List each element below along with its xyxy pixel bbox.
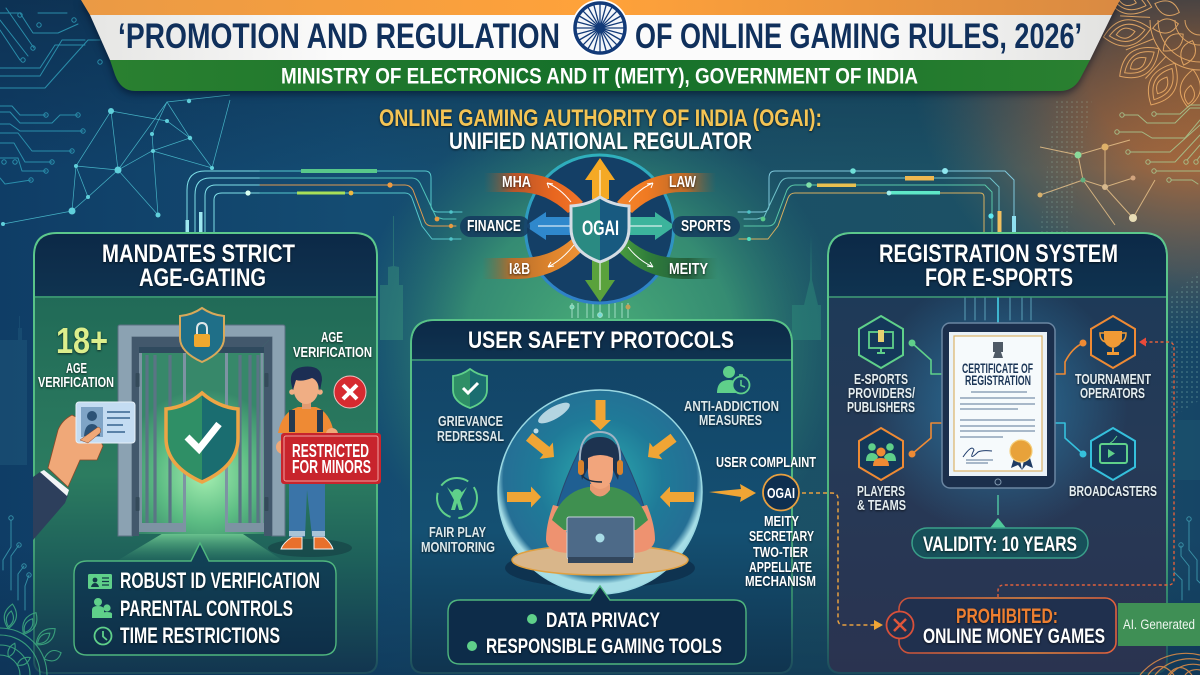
players and teams: PLAYERS bbox=[857, 483, 905, 500]
meity secretary label: SECRETARY bbox=[749, 528, 814, 545]
saffron band bbox=[81, 0, 1120, 15]
title text: ‘PROMOTION AND REGULATION bbox=[118, 17, 560, 56]
restricted sign: FOR MINORS bbox=[292, 457, 371, 477]
label pill sports bbox=[672, 216, 740, 237]
certificate title: CERTIFICATE OF bbox=[962, 361, 1033, 376]
circuit traces: top right bbox=[1115, 105, 1200, 184]
meity secretary label: MEITY bbox=[764, 513, 799, 530]
panel header: USER SAFETY PROTOCOLS bbox=[468, 327, 734, 354]
grievance redressal: GRIEVANCE bbox=[438, 413, 503, 430]
anti-addiction measures: ANTI-ADDICTION bbox=[684, 398, 779, 415]
hub disc bbox=[526, 155, 674, 303]
hair bbox=[580, 437, 620, 480]
security gate bbox=[115, 325, 285, 562]
time restrictions text: TIME RESTRICTIONS bbox=[120, 623, 280, 648]
arrow right bbox=[626, 212, 675, 240]
table bbox=[512, 545, 688, 575]
hand with id card bbox=[33, 402, 135, 540]
ai generated tag bbox=[1118, 603, 1200, 646]
certificate body lines bbox=[960, 392, 1035, 463]
arrow left bbox=[525, 212, 574, 240]
appellate label: MECHANISM bbox=[745, 573, 816, 590]
white band bbox=[90, 15, 1112, 60]
arms bbox=[546, 505, 572, 553]
tournament operators: TOURNAMENT bbox=[1075, 371, 1151, 388]
title banner bbox=[81, 0, 1120, 91]
panel header: FOR E-SPORTS bbox=[925, 264, 1073, 292]
fair play monitoring bbox=[421, 478, 495, 556]
band MEITY bbox=[619, 237, 718, 279]
network nodes: left bbox=[1, 95, 230, 226]
18+ badge: AGE bbox=[66, 360, 87, 377]
prohibited box bbox=[899, 598, 1116, 653]
panel body bbox=[34, 233, 377, 673]
age verification label bbox=[293, 329, 372, 361]
panel header bbox=[35, 234, 376, 297]
gold seal bbox=[1010, 440, 1033, 470]
hub to panel traces bbox=[570, 303, 630, 318]
band I&B bbox=[482, 237, 581, 279]
18+ badge: 18+ bbox=[56, 320, 108, 361]
platform bbox=[505, 548, 695, 588]
band MHA bbox=[484, 173, 583, 213]
circuit traces: hub left bbox=[186, 169, 462, 241]
anti-addiction measures bbox=[684, 366, 779, 429]
certificate tablet bbox=[942, 323, 1055, 488]
mandala: top right bbox=[1101, 0, 1200, 111]
panel: user safety bbox=[411, 320, 816, 673]
connector traces bbox=[912, 298, 1083, 454]
robust id text: ROBUST ID VERIFICATION bbox=[120, 568, 320, 593]
signature bbox=[963, 448, 992, 457]
grievance redressal bbox=[437, 369, 504, 445]
dashed arrow: complaint to prohibited bbox=[802, 493, 883, 630]
icon: clock bbox=[94, 628, 112, 644]
appellate label: APPELLATE bbox=[749, 559, 812, 576]
appellate label bbox=[745, 544, 816, 590]
panel header bbox=[829, 234, 1166, 297]
players and teams bbox=[857, 428, 916, 514]
broadcasters: BROADCASTERS bbox=[1069, 483, 1157, 500]
gamer in protective bubble bbox=[498, 390, 702, 594]
panel header: REGISTRATION SYSTEM bbox=[879, 240, 1118, 268]
complaint pathway bbox=[709, 454, 816, 590]
hub shield: OGAI bbox=[582, 217, 619, 240]
icon: prohibited bbox=[886, 612, 914, 638]
e-sports providers: E-SPORTS bbox=[854, 371, 908, 388]
e-sports providers bbox=[847, 316, 916, 416]
restricted sign: RESTRICTED bbox=[292, 441, 369, 461]
restricted minor figure bbox=[268, 367, 352, 557]
band LAW bbox=[617, 173, 716, 213]
circuit traces: left margin bbox=[3, 516, 31, 610]
tournament operators: OPERATORS bbox=[1080, 385, 1145, 402]
check shield bbox=[166, 393, 238, 482]
broadcasters bbox=[1069, 428, 1157, 500]
grievance redressal: REDRESSAL bbox=[437, 428, 504, 445]
shirt bbox=[552, 487, 648, 530]
id and controls list bbox=[74, 543, 336, 655]
icon: id card bbox=[88, 574, 112, 589]
responsible gaming text: RESPONSIBLE GAMING TOOLS bbox=[486, 635, 722, 658]
players and teams: & TEAMS bbox=[857, 497, 906, 514]
laptop bbox=[567, 517, 634, 563]
band MHA: MHA bbox=[502, 174, 531, 191]
network nodes: right bbox=[1038, 140, 1155, 225]
heading line two: UNIFIED NATIONAL REGULATOR bbox=[449, 128, 752, 155]
mandala: bottom right bbox=[1140, 653, 1200, 675]
certificate title second line: REGISTRATION bbox=[965, 373, 1031, 388]
prohibited box: PROHIBITED: bbox=[956, 605, 1058, 628]
band I&B: I&B bbox=[509, 261, 530, 278]
age verification label: VERIFICATION bbox=[293, 344, 372, 361]
ogai circle: OGAI bbox=[767, 485, 795, 502]
circuit traces: hub right bbox=[738, 168, 1016, 241]
e-sports providers: PROVIDERS/ bbox=[848, 385, 916, 402]
icon: parents bbox=[92, 598, 112, 618]
chair bbox=[556, 445, 645, 525]
icon: denied bbox=[334, 376, 366, 408]
appellate label: TWO-TIER bbox=[753, 544, 808, 561]
18+ badge: VERIFICATION bbox=[38, 374, 114, 391]
mandala: bottom left bbox=[0, 603, 63, 675]
complaint arrow bbox=[709, 484, 756, 502]
circuit traces: top left bbox=[0, 8, 102, 184]
emblem bbox=[993, 342, 1003, 358]
label pill finance bbox=[460, 216, 530, 237]
validity pill: VALIDITY: 10 YEARS bbox=[923, 533, 1077, 556]
panel body bbox=[828, 233, 1167, 673]
subtitle: MINISTRY OF ELECTRONICS AND IT (MEITY), GOVERNMENT OF INDIA bbox=[281, 64, 918, 88]
e-sports providers: PUBLISHERS bbox=[847, 399, 915, 416]
age verification label: AGE bbox=[321, 329, 343, 346]
label pill finance: FINANCE bbox=[467, 218, 521, 235]
tournament operators bbox=[1075, 316, 1151, 402]
band LAW: LAW bbox=[669, 174, 696, 191]
title text continued: OF ONLINE GAMING RULES, 2026’ bbox=[635, 17, 1082, 56]
fair play monitoring: MONITORING bbox=[421, 539, 495, 556]
parental controls text: PARENTAL CONTROLS bbox=[120, 596, 293, 621]
face bbox=[588, 455, 613, 489]
privacy and tools box bbox=[448, 586, 746, 664]
protection arrows bbox=[507, 400, 694, 508]
hub shield bbox=[571, 197, 629, 262]
18+ badge bbox=[38, 320, 114, 391]
band MEITY: MEITY bbox=[669, 261, 709, 278]
headset bbox=[578, 432, 623, 482]
panel: e-sports registration bbox=[828, 233, 1167, 673]
prohibited box: ONLINE MONEY GAMES bbox=[923, 625, 1105, 648]
panel header bbox=[412, 321, 791, 360]
green band bbox=[110, 60, 1090, 91]
user complaint label: USER COMPLAINT bbox=[716, 454, 816, 471]
panel: age-gating bbox=[33, 233, 381, 673]
panel body bbox=[411, 320, 792, 673]
dashed arrow: prohibited to tournament bbox=[998, 338, 1174, 597]
data privacy text: DATA PRIVACY bbox=[546, 609, 660, 632]
restricted sign bbox=[281, 433, 381, 484]
authority heading bbox=[379, 105, 822, 155]
fair play monitoring: FAIR PLAY bbox=[429, 524, 486, 541]
anti-addiction measures: MEASURES bbox=[699, 412, 762, 429]
lock shield bbox=[180, 308, 224, 362]
arrow up bbox=[585, 158, 615, 199]
label pill sports: SPORTS bbox=[681, 218, 731, 235]
neck bbox=[590, 484, 610, 496]
ashoka chakra bbox=[572, 0, 628, 56]
arrow down bbox=[585, 260, 615, 302]
ogai hub diagram bbox=[460, 155, 740, 303]
heading line one: ONLINE GAMING AUTHORITY OF INDIA (OGAI): bbox=[379, 105, 822, 132]
panel header: MANDATES STRICT bbox=[102, 240, 295, 268]
circuit traces: right margin bbox=[1174, 517, 1200, 600]
meity secretary label bbox=[749, 513, 814, 545]
bubble bbox=[498, 390, 702, 594]
panel header: AGE-GATING bbox=[139, 264, 266, 292]
validity pill bbox=[912, 495, 1088, 558]
